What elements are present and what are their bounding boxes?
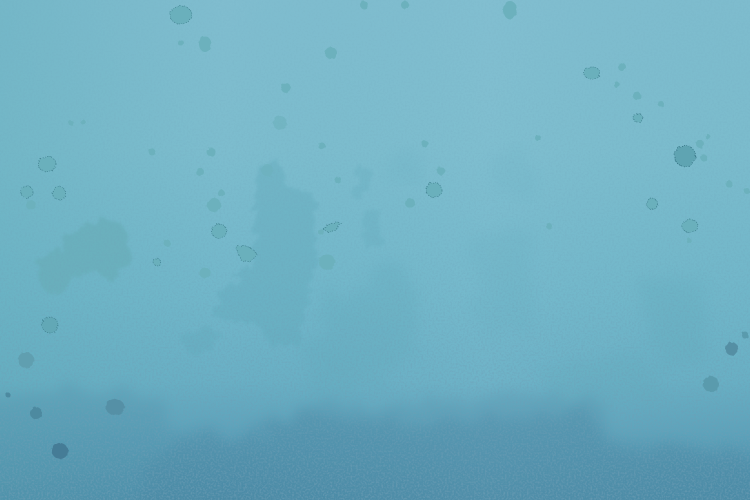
- paper grain texture: [0, 333, 750, 500]
- dark splatter drops: [6, 332, 748, 459]
- soft splatter drops: [26, 1, 750, 278]
- large stain left: [39, 220, 131, 292]
- outlined splatter drops: [21, 6, 698, 333]
- central wash stains: [180, 150, 712, 405]
- lower dark wash: [0, 388, 750, 500]
